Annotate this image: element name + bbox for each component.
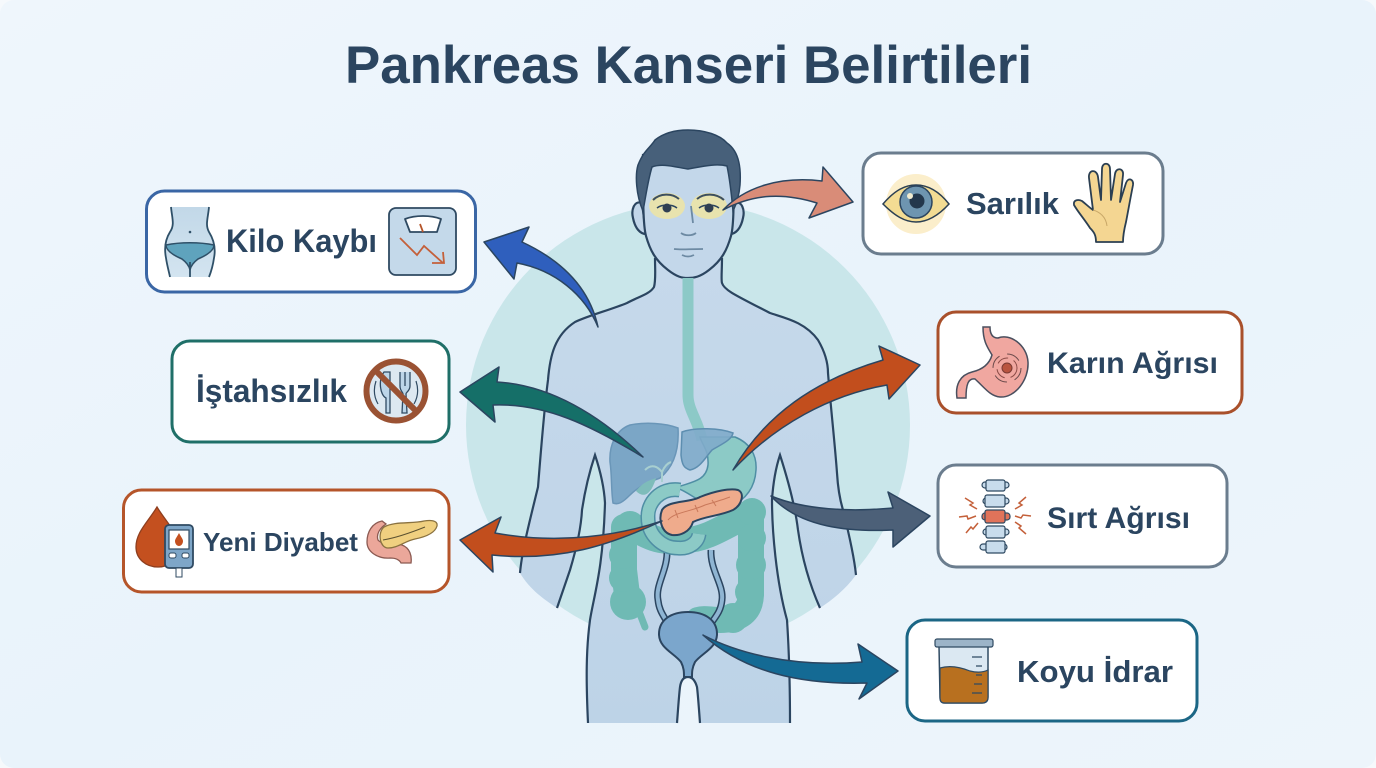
label: Sırt Ağrısı (1047, 502, 1190, 535)
background circle (466, 203, 910, 647)
panel: Sırt Ağrısı (938, 465, 1227, 567)
body silhouette (520, 258, 856, 723)
panel: Koyu İdrar (907, 620, 1197, 721)
label: Karın Ağrısı (1047, 347, 1218, 380)
label: İştahsızlık (196, 373, 347, 409)
icon: waist (165, 207, 215, 277)
icon: spine (959, 480, 1031, 553)
bladder (659, 612, 717, 677)
arrow: to Sırt Ağrısı (771, 492, 930, 547)
arrow: to Sarılık (723, 167, 853, 218)
icon: stomach (957, 327, 1028, 398)
face details (674, 206, 703, 256)
human body figure (520, 130, 856, 723)
stomach (675, 437, 756, 509)
panel: Sarılık (863, 153, 1163, 254)
arrow: to Kilo Kaybı (484, 227, 598, 327)
hair (636, 130, 740, 211)
panel: İştahsızlık (172, 341, 449, 442)
icon: pancreas (367, 521, 437, 563)
label: Yeni Diyabet (203, 527, 358, 557)
arrow: to İştahsızlık (460, 367, 643, 457)
icon: weight scale (389, 208, 456, 275)
icon: glucose meter (165, 525, 193, 577)
title: Pankreas Kanseri Belirtileri (345, 36, 1032, 95)
icon: urine cup (935, 639, 993, 703)
duodenum (648, 490, 699, 548)
panel: Karın Ağrısı (938, 312, 1242, 413)
label: Kilo Kaybı (226, 223, 377, 259)
label: Koyu İdrar (1017, 654, 1173, 689)
jaundiced eyes (649, 193, 727, 219)
arrow: to Karın Ağrısı (733, 346, 920, 470)
panel: Kilo Kaybı (146, 191, 476, 292)
esophagus (688, 278, 702, 440)
arrow: to Koyu İdrar (703, 635, 898, 699)
panel: Yeni Diyabet (124, 490, 449, 592)
liver (610, 423, 678, 504)
pancreas (660, 489, 742, 535)
label: Sarılık (966, 186, 1060, 221)
head (632, 130, 744, 278)
arrow: to Yeni Diyabet (460, 517, 662, 572)
ureters (658, 550, 722, 622)
icon: yellow hand (1074, 164, 1133, 242)
icon: yellow eye (883, 174, 949, 234)
icon: blood drop (136, 507, 178, 567)
icon: no food (366, 362, 426, 420)
colon (609, 498, 766, 633)
